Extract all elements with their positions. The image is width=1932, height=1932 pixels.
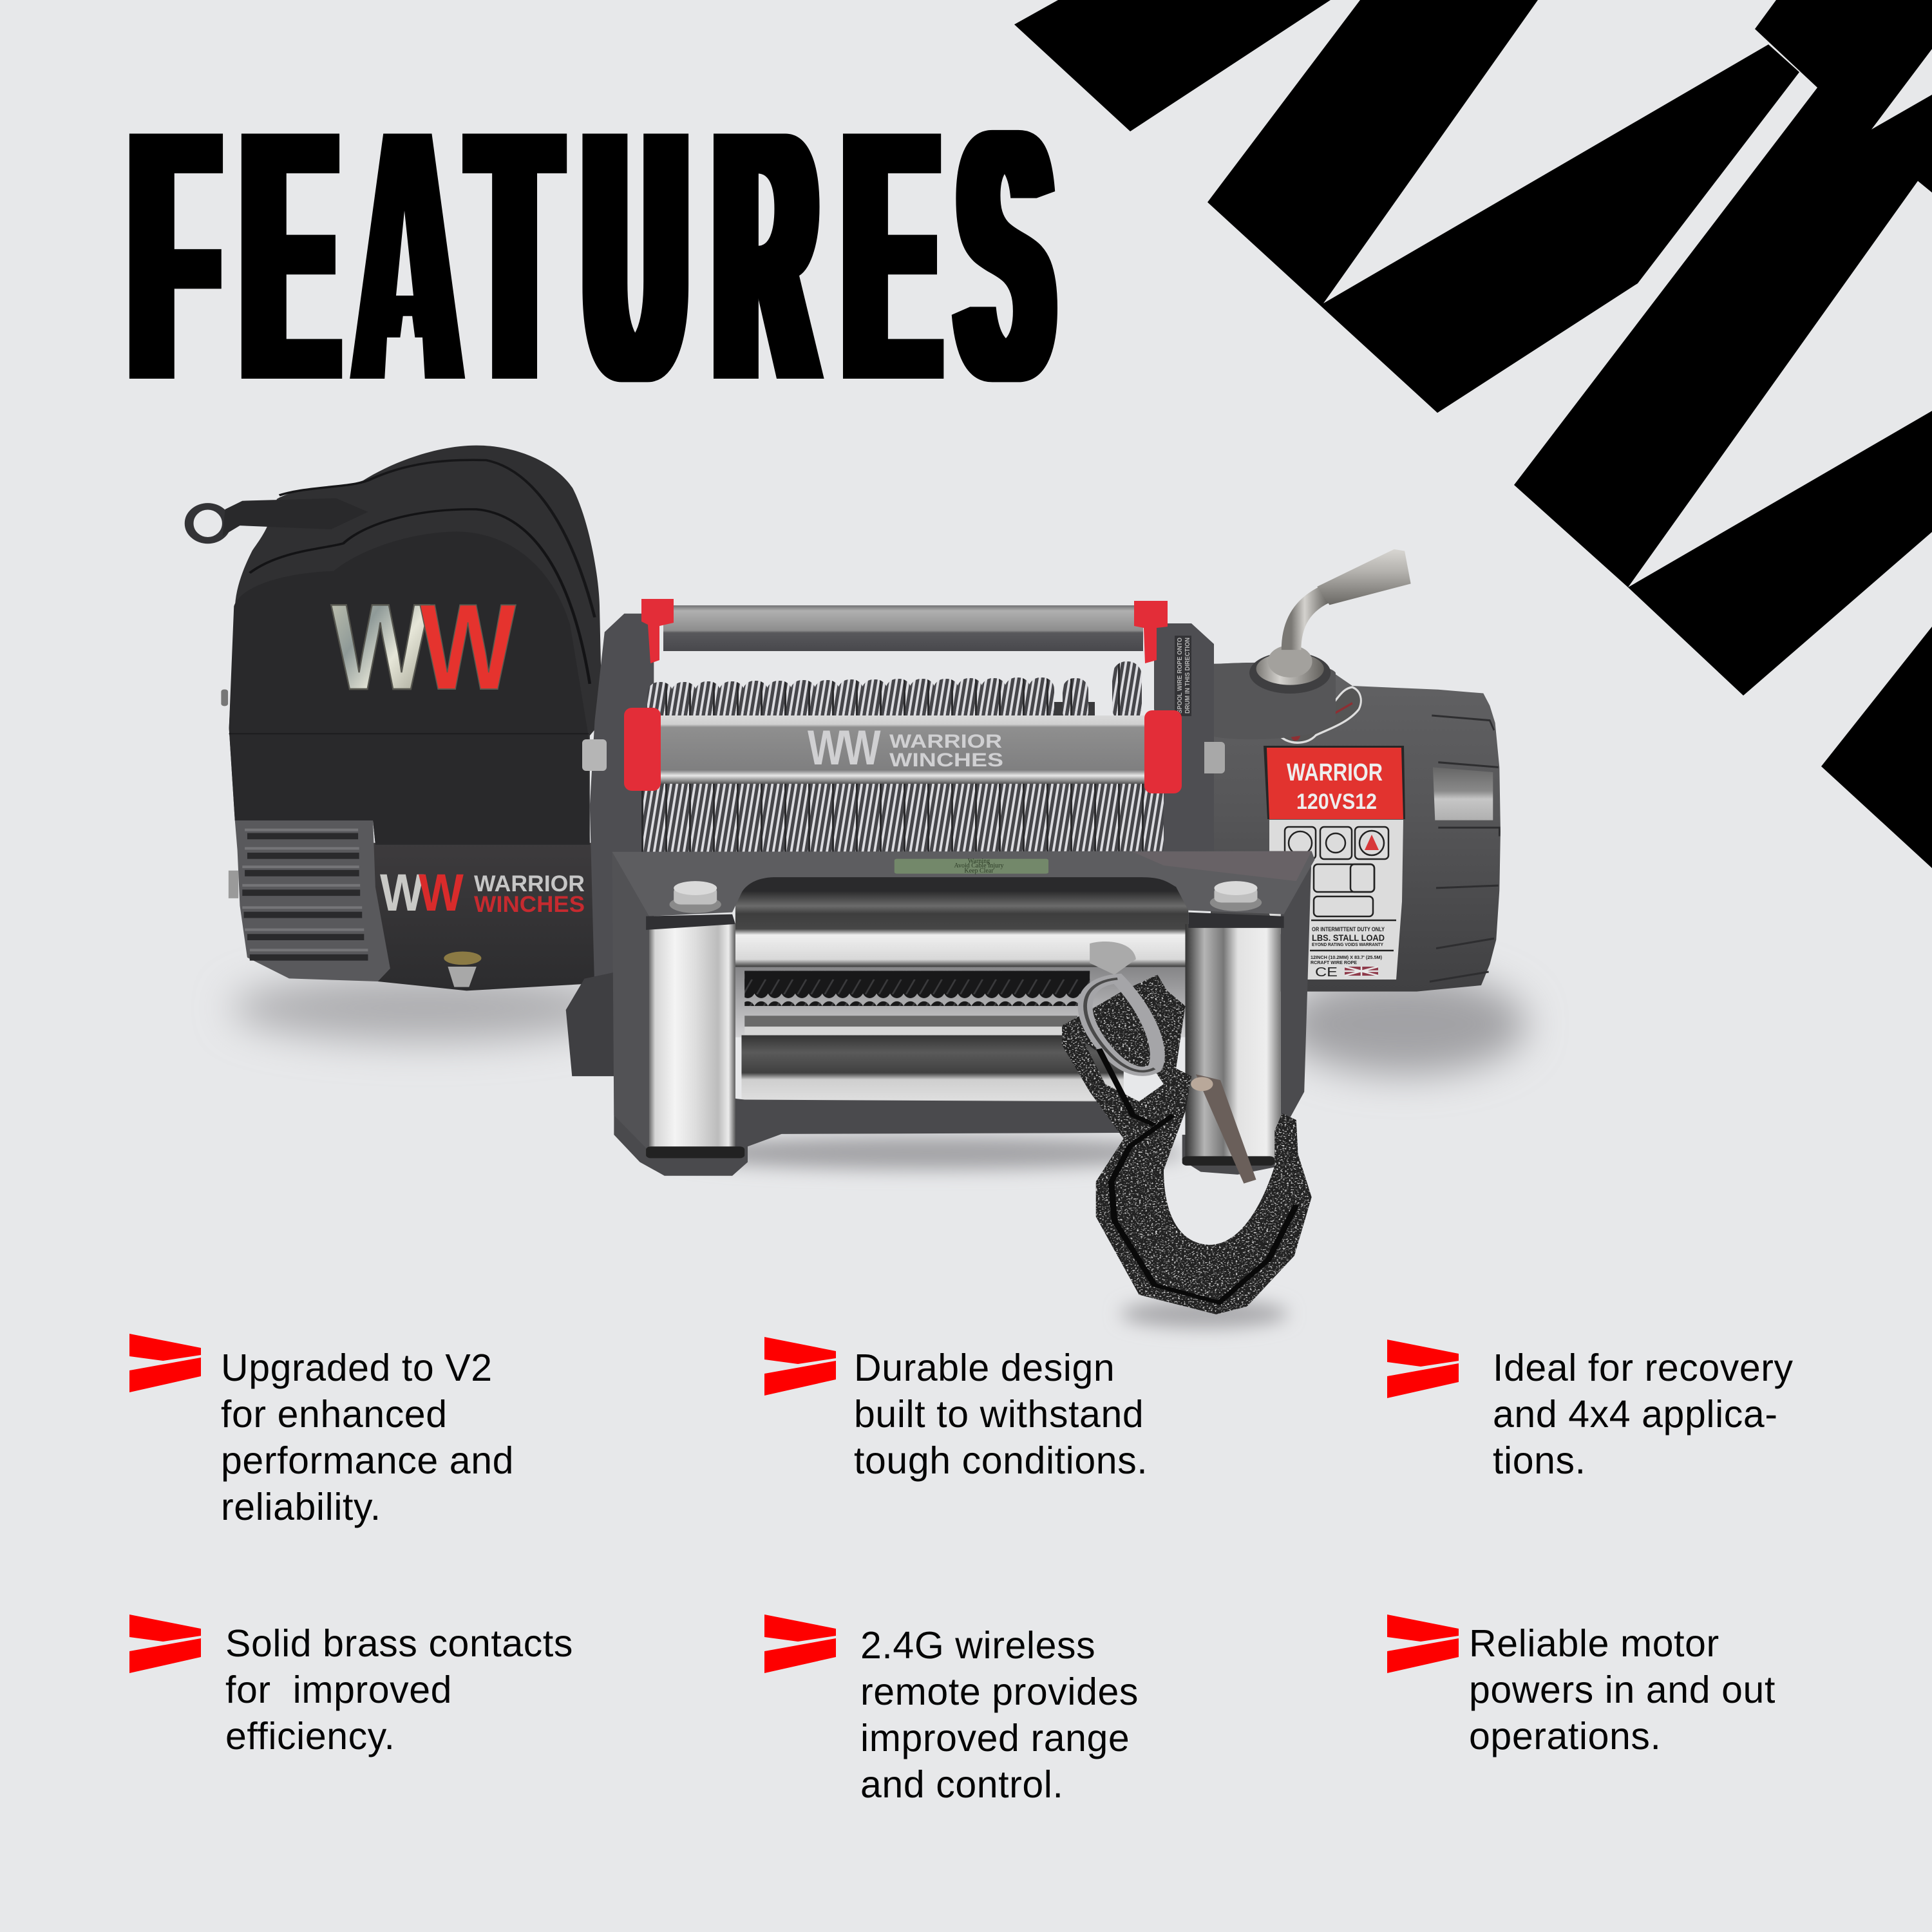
back tie bar [641, 599, 1168, 663]
text block: Upgraded to V2 [221, 1347, 493, 1389]
rubber plug [189, 506, 227, 540]
text block: for improved [225, 1669, 452, 1711]
feature: reliable motor [1387, 1615, 1776, 1757]
clutch lever [1213, 549, 1411, 739]
motor spec label: 120VS12 [1296, 790, 1377, 814]
mounting foot [566, 971, 621, 1076]
logo: motor badge [380, 862, 585, 922]
right frame plate [1154, 623, 1214, 902]
right frame plate: SPOOL WIRE ROPE ONTO [1176, 638, 1184, 714]
motor spec label: 12INCH (10.2MM) X 83.7' (25.5M) [1311, 956, 1382, 960]
text block: tough conditions. [854, 1439, 1148, 1482]
icon: red chevron [1387, 1340, 1459, 1398]
text block [1493, 1347, 1794, 1482]
silver worn patch [1433, 767, 1493, 820]
motor end cap [235, 820, 390, 981]
right plate [1281, 852, 1312, 1135]
hook body [1062, 975, 1312, 1314]
top plate [612, 851, 1314, 916]
upper rope coils [647, 661, 1142, 728]
motor spec label: EYOND RATING VOIDS WARRANTY [1312, 943, 1383, 947]
logo: motor badge: WINCHES [474, 892, 585, 917]
text block: Reliable motor [1469, 1622, 1719, 1665]
wire thimble [1085, 979, 1157, 1072]
text block: remote provides [860, 1671, 1139, 1713]
text block: and control. [860, 1763, 1064, 1806]
icon: red chevron [764, 1337, 836, 1396]
lower rope drum [641, 784, 1164, 857]
text block: tions. [1493, 1439, 1586, 1482]
housing front plate [229, 531, 590, 845]
motor spec label: RCRAFT WIRE ROPE [1311, 961, 1357, 965]
direction sticker [1276, 687, 1361, 743]
text block: Solid brass contacts [225, 1622, 573, 1665]
logo: motor badge: W [380, 864, 424, 922]
motor spec label: WARRIOR [1287, 759, 1383, 786]
lower horizontal roller [741, 1036, 1124, 1104]
text block: for enhanced [221, 1393, 448, 1435]
feature: solid brass contacts [129, 1615, 573, 1757]
warning label text: Warning [968, 858, 990, 865]
text block: improved range [860, 1717, 1130, 1759]
motor left body [373, 843, 597, 990]
left plate [612, 852, 652, 1154]
roller fairlead [566, 851, 1314, 1176]
front tie bar: WINCHES [889, 750, 1003, 771]
green warning label [895, 859, 1048, 874]
hook groove [1112, 1115, 1296, 1303]
vertical chrome rollers [649, 924, 735, 1154]
wire into roller [1090, 942, 1136, 975]
shadows under winch [232, 974, 1526, 1328]
feature: wireless remote [764, 1615, 1139, 1806]
feature: upgraded to V2 [129, 1334, 514, 1528]
rear frame plate [590, 614, 654, 994]
front tie bar: WARRIOR [889, 731, 1002, 752]
motor spec label [1264, 746, 1405, 980]
text block: operations. [1469, 1715, 1662, 1757]
hook [1062, 975, 1312, 1314]
front tie bar: W [808, 720, 846, 775]
title: FEATURES [133, 57, 1050, 451]
text block: reliability. [221, 1486, 381, 1528]
housing back shell [229, 446, 602, 845]
bolts [669, 896, 721, 913]
text block: performance and [221, 1439, 514, 1482]
text block [1469, 1622, 1776, 1757]
icon: red chevron [1387, 1615, 1459, 1673]
warning label text [954, 858, 1004, 875]
logo: motor badge: WARRIOR [474, 871, 585, 896]
latch [1196, 1074, 1256, 1184]
rope guard front plate and gearbox housing [189, 446, 654, 994]
motor spec label: OR INTERMITTENT DUTY ONLY [1312, 926, 1385, 933]
text block [860, 1624, 1139, 1806]
feature: durable design [764, 1337, 1148, 1482]
front tie bar: W [843, 720, 881, 775]
text block: powers in and out [1469, 1669, 1776, 1711]
text block: and 4x4 applica- [1493, 1393, 1778, 1435]
logo: large WW badge: W [331, 579, 430, 715]
text block: 2.4G wireless [860, 1624, 1095, 1667]
top horizontal roller [735, 873, 1188, 896]
warning label text: Keep Clear [964, 867, 994, 875]
warning label text: Avoid Cable Injury [954, 862, 1004, 869]
icon: red chevron [764, 1615, 836, 1673]
text block [854, 1347, 1148, 1482]
feature: ideal for recovery [1387, 1340, 1794, 1482]
text block [221, 1347, 514, 1528]
base plate [614, 1084, 1121, 1176]
text block: built to withstand [854, 1393, 1144, 1435]
body screw [444, 952, 481, 965]
logo: large WW badge [331, 579, 516, 715]
text block: Ideal for recovery [1493, 1347, 1794, 1389]
text block: Durable design [854, 1347, 1115, 1389]
see-through gap and rope [735, 959, 1191, 1037]
front tie bar [582, 708, 1225, 793]
OUT sticker text: OUT [1288, 723, 1303, 731]
icon: red chevron [129, 1615, 201, 1673]
text block [225, 1622, 573, 1757]
motor spec label: CE [1315, 965, 1338, 980]
right frame plate: DRUM IN THIS DIRECTION [1184, 638, 1191, 714]
logo: large WW badge: W [420, 579, 516, 715]
icon: red chevron [129, 1334, 201, 1392]
text block: efficiency. [225, 1715, 395, 1757]
electric motor body [1211, 664, 1501, 992]
motor spec label: LBS. STALL LOAD [1312, 933, 1385, 943]
logo: motor badge: W [419, 862, 464, 922]
